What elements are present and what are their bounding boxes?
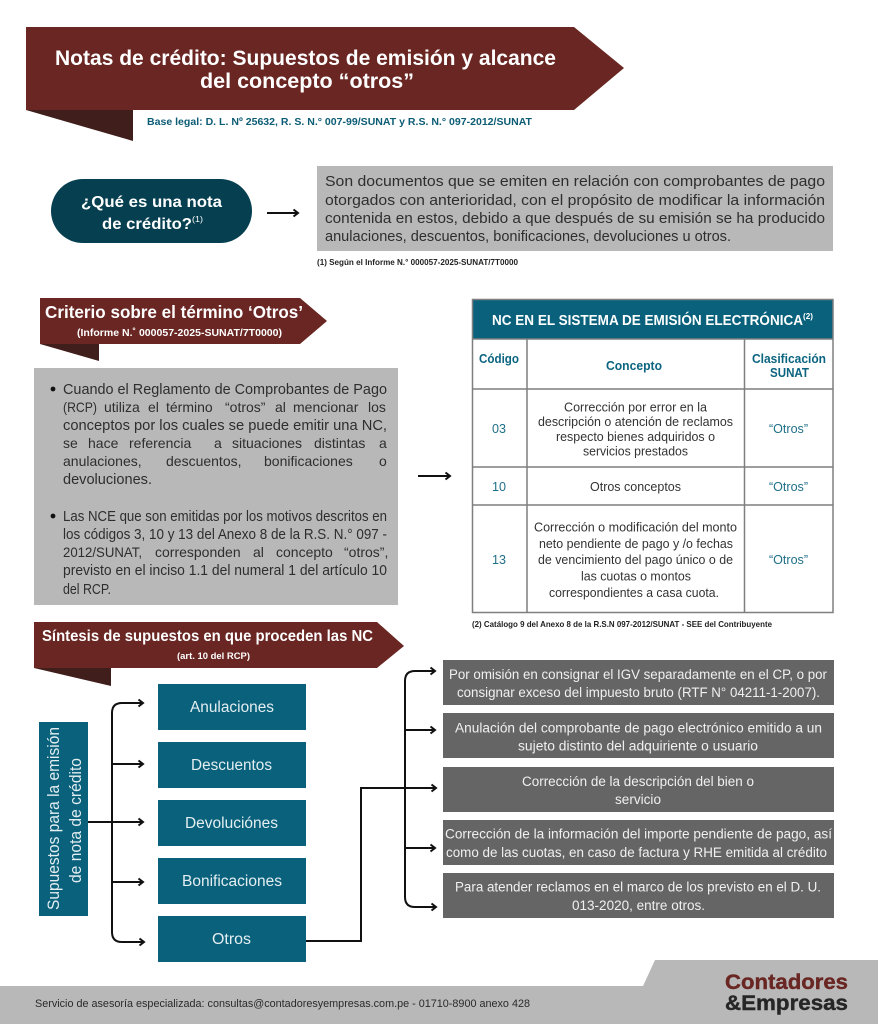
- panel: definition: contenida en estos, debido a que después de su emisión se ha producido: [325, 210, 825, 227]
- box: detail 3: servicio: [615, 792, 661, 807]
- footnote 2: (2) Catálogo 9 del Anexo 8 de la R.S.N 097-2012/SUNAT - SEE del Contribuyente: [472, 619, 772, 629]
- box: devoluciones: Devoluciónes: [185, 815, 278, 832]
- row 03: “Otros”: [769, 421, 808, 436]
- title banner: [26, 27, 624, 141]
- panel: criterio text: a: [214, 435, 222, 451]
- arrow: criterio to table: [418, 475, 450, 477]
- row 10: “Otros”: [769, 479, 808, 494]
- panel: criterio text: al: [253, 544, 264, 560]
- table header: Concepto: [606, 358, 662, 373]
- panel: criterio text: 2012/SUNAT,: [63, 544, 142, 560]
- box: detail 4: Corrección de la información del importe pendiente de pago, así: [445, 826, 832, 842]
- table: NC en el sistema de emisión electrónica: NC EN EL SISTEMA DE EMISIÓN ELECTRÓNICA: [492, 311, 803, 329]
- row 03: [492, 400, 808, 458]
- box: detail 1: [443, 660, 834, 705]
- row 13: Corrección o modificación del monto: [534, 520, 737, 534]
- row 10: Otros conceptos: [590, 479, 681, 494]
- panel: criterio text: devoluciones.: [63, 471, 152, 488]
- footnote 1: (1) Según el Informe N.° 000057-2025-SUNAT/7T0000: [317, 257, 518, 267]
- pill: what is a credit note: de crédito?: [102, 216, 192, 233]
- row 03: servicios prestados: [583, 444, 688, 458]
- panel: criterio text: Las NCE que son emitidas por los motivos descritos en: [63, 508, 387, 525]
- logo: [725, 970, 848, 1015]
- table: NC en el sistema de emisión electrónica: [472, 299, 833, 613]
- box: detail 1: Por omisión en consignar el IGV separadamente en el CP, o por: [449, 667, 827, 682]
- table: NC en el sistema de emisión electrónica: (2): [803, 312, 813, 321]
- logo: Contadores: [725, 970, 848, 994]
- row 10: 10: [492, 479, 506, 494]
- row 13: correspondientes a casa cuota.: [549, 585, 719, 600]
- panel: criterio text: los códigos 3, 10 y 13 del Anexo 8 de la R.S. N.° 097 -: [63, 526, 387, 543]
- panel: criterio text: se: [63, 435, 78, 451]
- panel: criterio text: del RCP.: [63, 581, 111, 598]
- box: otros: Otros: [212, 931, 251, 948]
- banner: síntesis: (art. 10 del RCP): [177, 651, 250, 662]
- row 13: las cuotas o montos: [581, 568, 691, 584]
- legal basis: Base legal: D. L. Nº 25632, R. S. N.° 007-99/SUNAT y R.S. N.° 097-2012/SUNAT: [147, 117, 532, 128]
- banner: criterio: Criterio sobre el término ‘Otros’: [45, 302, 303, 322]
- banner: criterio: [40, 298, 327, 361]
- vertical box: supuestos: [39, 722, 88, 916]
- panel: criterio text: los: [368, 399, 386, 415]
- row 10: [492, 479, 808, 494]
- panel: criterio text: (RCP): [63, 399, 97, 415]
- panel: criterio text: mencionar: [293, 399, 359, 415]
- logo: &Empresas: [725, 991, 848, 1015]
- panel: criterio text: concepto: [276, 544, 333, 560]
- box: detail 5: 013-2020, entre otros.: [572, 898, 705, 913]
- panel: criterio text: bonificaciones: [264, 453, 353, 469]
- box: anulaciones: Anulaciones: [190, 699, 274, 716]
- panel: definition: anulaciones, descuentos, bonificaciones, devoluciones u otros.: [325, 228, 731, 245]
- panel: definition: otorgados con anterioridad, con el propósito de modificar la información: [325, 192, 825, 209]
- panel: criterio text: o: [379, 453, 387, 469]
- title: del concepto “otros”: [200, 70, 414, 93]
- panel: criterio text: término: [166, 399, 213, 415]
- footer: [0, 960, 878, 1024]
- box: detail 2: sujeto distinto del adquiriente o usuario: [518, 738, 758, 754]
- box: detail 1: consignar exceso del impuesto bruto (RTF N° 04211-1-2007).: [457, 685, 820, 700]
- table header: Código: [479, 351, 519, 366]
- panel: criterio text: corresponden: [155, 544, 241, 560]
- panel: criterio text: hace: [88, 435, 119, 451]
- arrow: definition: [267, 212, 298, 214]
- panel: criterio text: referencia: [129, 435, 191, 451]
- panel: criterio text: descuentos,: [166, 453, 242, 469]
- row 03: 03: [492, 421, 506, 436]
- row 13: neto pendiente de pago y /o fechas: [539, 536, 733, 551]
- box: descuentos: Descuentos: [191, 757, 272, 774]
- arrows: details branching: [405, 671, 436, 907]
- panel: definition: [317, 166, 833, 251]
- banner: síntesis: Síntesis de supuestos en que proceden las NC: [42, 628, 373, 645]
- panel: criterio text: a: [379, 435, 387, 451]
- box: detail 4: [443, 820, 834, 865]
- box: detail 3: Corrección de la descripción del bien o: [522, 774, 754, 789]
- pill: what is a credit note: ¿Qué es una nota: [81, 194, 222, 211]
- row 13: 13: [492, 552, 506, 567]
- row 03: respecto bienes adquiridos o: [556, 429, 715, 444]
- box: detail 2: [443, 713, 834, 758]
- box: detail 5: Para atender reclamos en el marco de los previsto en el D. U.: [455, 880, 821, 894]
- row 13: [492, 520, 808, 600]
- panel: criterio text: el: [148, 399, 159, 415]
- title: Notas de crédito: Supuestos de emisión y alcance: [55, 47, 556, 70]
- row 03: Corrección por error en la: [564, 400, 708, 414]
- panel: criterio text: “otros”,: [344, 544, 388, 560]
- pill: what is a credit note: (1): [192, 214, 203, 224]
- box: bonificaciones: [158, 858, 306, 904]
- panel: criterio text: al: [275, 399, 286, 415]
- panel: criterio text: “otros”: [225, 399, 266, 415]
- pill: what is a credit note: [51, 179, 252, 243]
- box: detail 2: Anulación del comprobante de pago electrónico emitido a un: [455, 720, 822, 736]
- panel: criterio text: conceptos por los cuales se puede emitir una NC,: [63, 417, 387, 434]
- box: detail 3: [443, 767, 834, 812]
- panel: criterio text: utiliza: [104, 399, 140, 415]
- table header: [479, 351, 826, 380]
- vertical box: supuestos: de nota de crédito: [66, 758, 85, 883]
- footer contact text: Servicio de asesoría especializada: consultas@contadoresyempresas.com.pe - 01710-8900 anexo 428: [35, 998, 530, 1010]
- panel: criterio text: anulaciones,: [63, 453, 142, 469]
- panel: criterio text: Cuando el Reglamento de Comprobantes de Pago: [63, 381, 387, 398]
- box: bonificaciones: Bonificaciones: [182, 873, 282, 890]
- box: detail 4: como de las cuotas, en caso de factura y RHE emitida al crédito: [446, 845, 827, 860]
- vertical box: supuestos: Supuestos para la emisión: [44, 727, 63, 910]
- connector: otros to details: [306, 788, 436, 941]
- panel: criterio text: situaciones: [232, 435, 302, 451]
- box: otros: [158, 916, 306, 962]
- box: descuentos: [158, 742, 306, 788]
- title: [55, 47, 556, 93]
- panel: criterio text: distintas: [314, 435, 365, 451]
- box: devoluciones: [158, 800, 306, 846]
- panel: criterio text: previsto en el inciso 1.1 del numeral 1 del artículo 10: [63, 562, 387, 579]
- banner: criterio: (Informe N.˚ 000057-2025-SUNAT/7T0000): [77, 327, 282, 339]
- panel: definition: Son documentos que se emiten en relación con comprobantes de pago: [325, 173, 825, 190]
- row 13: de vencimiento del pago único o de: [538, 552, 733, 567]
- banner: síntesis: [34, 622, 404, 686]
- table header: SUNAT: [770, 365, 809, 380]
- row 13: “Otros”: [769, 552, 808, 567]
- table header: Clasificación: [752, 351, 826, 366]
- arrows: supuestos branching: [88, 703, 144, 942]
- panel: criterio text: [34, 368, 398, 605]
- row 03: descripción o atención de reclamos: [538, 414, 733, 429]
- box: anulaciones: [158, 684, 306, 730]
- box: detail 5: [443, 873, 834, 918]
